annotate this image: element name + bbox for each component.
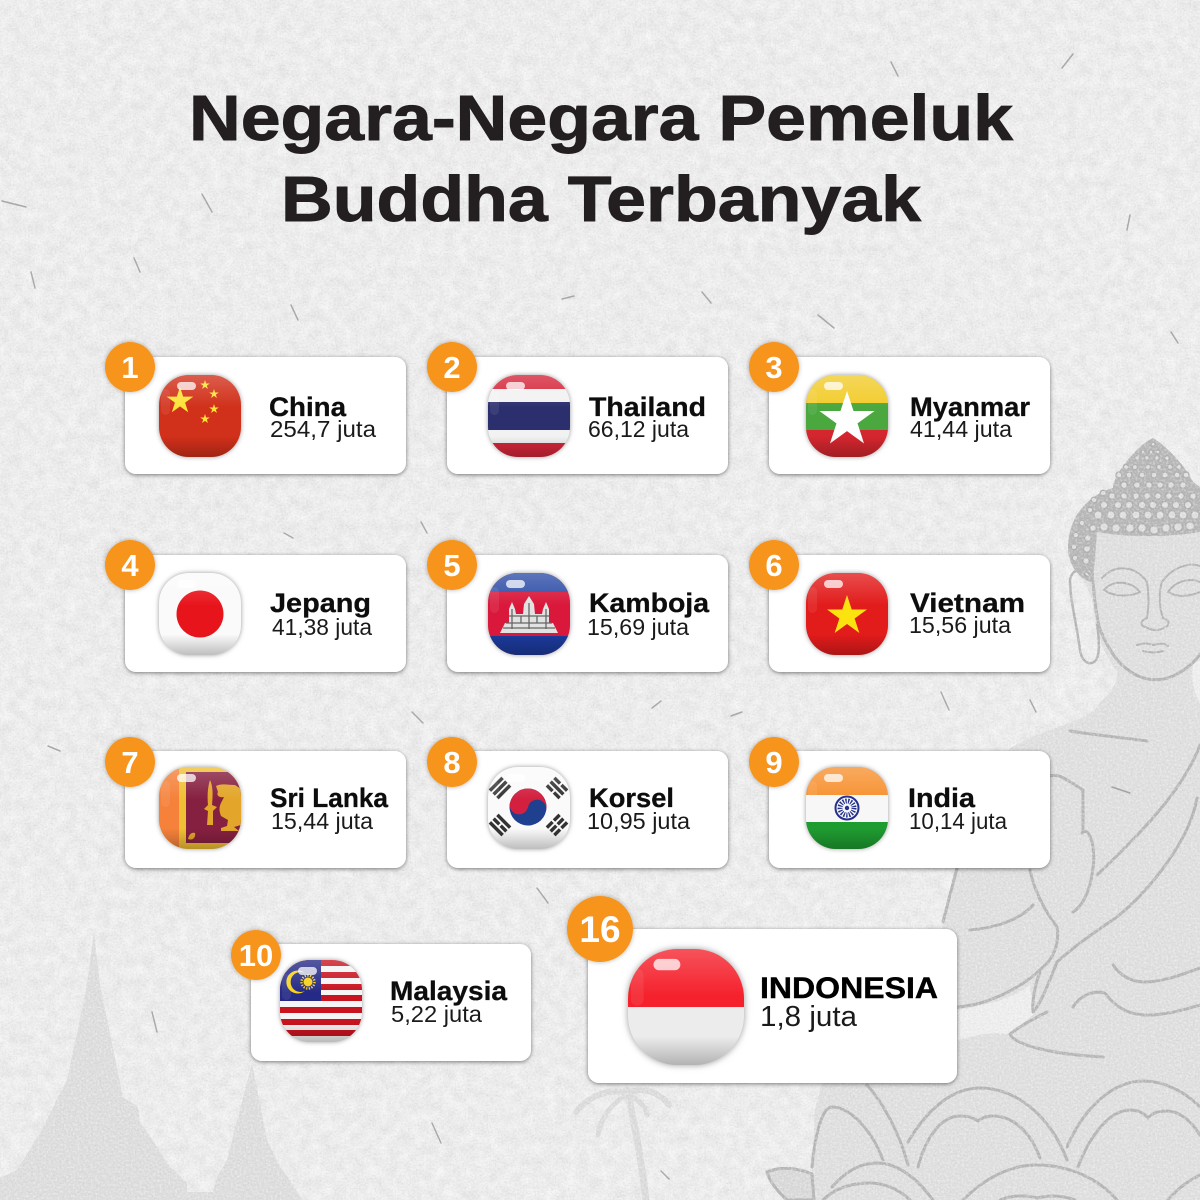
flag: Sri Lanka [159,767,241,849]
card 9: India [749,737,1050,868]
badge 16 [567,896,633,962]
label: Indonesia: 1,8 juta [760,1001,858,1033]
badge 10 [231,930,281,980]
label: Kamboja: Kamboja [589,588,710,618]
card 2: Thailand [427,342,728,474]
label: China [269,392,376,442]
label: Vietnam: 15,56 juta [909,612,1011,638]
label: Sri Lanka: 15,44 juta [271,808,373,834]
title: Buddha Terbanyak [281,163,921,235]
label: Myanmar: Myanmar [910,392,1030,422]
badge 9: 9 [765,745,783,780]
label: India: 10,14 juta [909,808,1007,834]
title: Negara-Negara Pemeluk [189,82,1013,154]
label: China: China [269,392,347,422]
flag: Jepang [159,573,241,655]
badge 5: 5 [443,548,461,583]
badge 4 [105,540,155,590]
flag: Thailand [488,375,570,457]
title [189,82,1013,235]
card 5: Kamboja [427,540,728,672]
card 6: Vietnam [749,540,1050,672]
face and figure line work [943,565,1200,1057]
badge 8 [427,737,477,787]
badge 4: 4 [121,548,139,583]
illustration: seated Buddha [767,438,1200,1200]
badge 5 [427,540,477,590]
badge 7 [105,737,155,787]
card 8: Korsel [427,737,728,868]
right gap beside neck [1192,660,1200,703]
label: Malaysia [390,976,508,1027]
illustration: palm tree [576,1090,669,1200]
badge 6 [749,540,799,590]
label: Jepang [270,588,372,640]
flag: China [159,375,241,457]
card 7: Sri Lanka [105,737,406,868]
label: Sri Lanka: Sri Lanka [270,783,389,813]
flag: Korsel [488,767,570,849]
label: Korsel: 10,95 juta [587,808,690,834]
label: Myanmar [910,392,1030,442]
hair curls [1071,442,1199,576]
badge 9 [749,737,799,787]
label: Korsel: Korsel [589,783,674,813]
label: Indonesia [760,972,938,1033]
label: Vietnam: Vietnam [910,588,1025,618]
card 10: Malaysia [231,930,531,1061]
label: Myanmar: 41,44 juta [910,416,1012,442]
label: Jepang: 41,38 juta [272,614,372,640]
hair base [1068,438,1200,582]
flag: Kamboja [488,573,570,655]
label: Malaysia: 5,22 juta [391,1001,482,1027]
lotus petals line work [812,1081,1200,1200]
badge 2: 2 [443,350,461,385]
label: India: India [908,783,976,813]
Buddha body silhouette [812,440,1200,1200]
badge 6: 6 [765,548,783,583]
badge 16: 16 [579,909,621,950]
Angkor Wat emblem [500,596,558,633]
illustration: temple silhouettes [0,932,302,1200]
flag: Indonesia [628,949,744,1065]
flag: Malaysia [280,960,362,1042]
badge 2 [427,342,477,392]
lotus side leaf [767,1168,814,1200]
badge 1: 1 [121,350,139,385]
card 1: China [105,342,406,474]
badge 1 [105,342,155,392]
lion emblem [216,784,241,831]
label: Malaysia: Malaysia [390,976,508,1006]
label: Indonesia: INDONESIA [760,972,938,1005]
flag: Vietnam [806,573,888,655]
gap between arm and lap [958,985,1034,1040]
label: Kamboja [587,588,710,640]
flag: India [806,767,888,849]
label: Korsel [587,783,690,834]
label: Thailand: Thailand [589,392,706,422]
label: Sri Lanka [270,783,389,834]
card 3: Myanmar [749,342,1050,474]
card 4: Jepang [105,540,406,672]
label: Jepang: Jepang [270,588,371,618]
badge 3: 3 [765,350,783,385]
label: Kamboja: 15,69 juta [587,614,689,640]
badge 3 [749,342,799,392]
label: India [908,783,1007,834]
badge 7: 7 [121,745,139,780]
badge 8: 8 [443,745,461,780]
label: China: 254,7 juta [270,416,376,442]
flag: Myanmar [806,375,888,457]
card 16: Indonesia [567,896,957,1083]
label: Thailand: 66,12 juta [588,416,689,442]
label: Vietnam [909,588,1025,638]
label: Thailand [588,392,706,442]
badge 10: 10 [239,938,273,973]
